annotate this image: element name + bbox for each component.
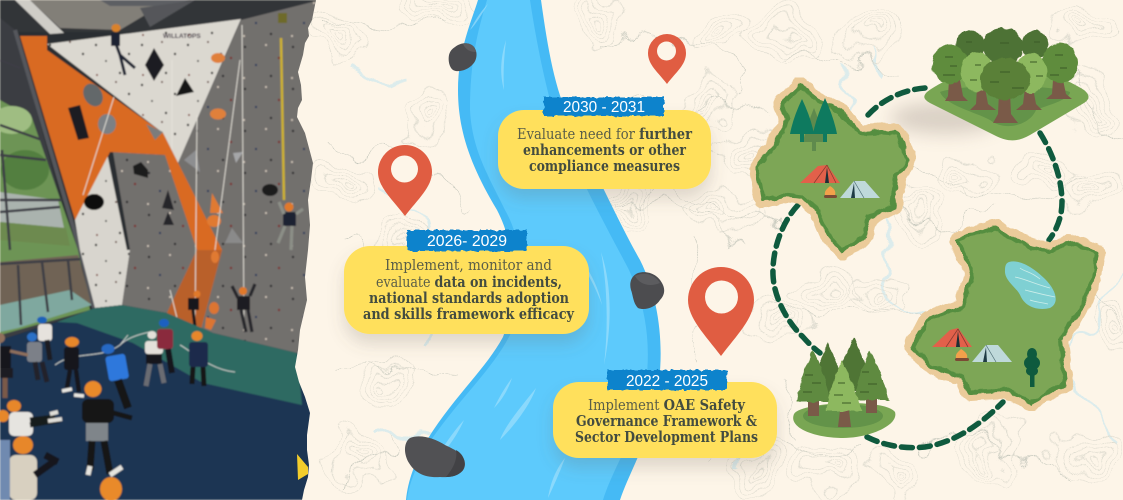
photo climbing holds: WILLATOPS bbox=[163, 33, 201, 40]
text block: 2026-2029: Implement, monitor and bbox=[385, 258, 552, 274]
icon: campfire bbox=[824, 186, 837, 198]
island 2: campsite with lake bbox=[913, 228, 1097, 402]
icon: lake bbox=[1005, 261, 1056, 309]
forest crowns bbox=[932, 28, 1078, 100]
forest shadow bbox=[890, 102, 1000, 134]
pin: 2030-2031 bbox=[648, 34, 686, 84]
text block: 2030-2031 bbox=[517, 126, 692, 175]
photo: climbing wall bbox=[0, 0, 320, 500]
island 1 land bbox=[757, 86, 908, 252]
photo ceiling bbox=[14, 0, 235, 36]
photo orange wall bbox=[20, 36, 222, 333]
forest: pine trees bbox=[793, 337, 895, 438]
island 1: campsite bbox=[757, 86, 908, 252]
photo grey wall bbox=[113, 0, 320, 356]
photo climbing holds bbox=[84, 33, 278, 330]
dashed trail bbox=[773, 88, 1062, 448]
text block: 2026-2029: and skills framework efficacy bbox=[363, 306, 575, 323]
callout: 2026-2029 bbox=[344, 230, 589, 334]
forest base bbox=[924, 68, 1088, 140]
callout: 2022-2025 bbox=[553, 370, 777, 458]
icon: red tent bbox=[932, 328, 972, 347]
banner: 2026-2029: 2026- 2029 bbox=[427, 233, 507, 250]
background: long contour lines bbox=[330, 24, 1123, 480]
rock 3 bbox=[405, 436, 465, 477]
photo floor bbox=[0, 305, 320, 500]
text block: 2026-2029: national standards adoption bbox=[369, 290, 569, 307]
text block: 2026-2029 bbox=[363, 258, 575, 323]
pine trunks bbox=[808, 398, 877, 427]
text block: 2022-2025: Governance Framework & bbox=[576, 413, 757, 430]
icon: red tent bbox=[800, 165, 840, 183]
background: topographic contour map bbox=[314, 0, 1123, 498]
river highlights bbox=[428, 4, 610, 498]
pin: 2026-2029 bbox=[378, 145, 432, 216]
pine crowns bbox=[797, 337, 889, 411]
icon: blue tent bbox=[840, 181, 880, 198]
icon: blue tent bbox=[972, 345, 1012, 362]
photo white wall bbox=[47, 19, 241, 308]
pine base bbox=[793, 403, 895, 438]
callout: 2030-2031 bbox=[498, 97, 711, 189]
banner: 2030-2031: 2030 - 2031 bbox=[563, 99, 645, 116]
icon: pine trees bbox=[790, 98, 837, 151]
text block: 2030-2031: Evaluate need for further bbox=[517, 126, 692, 143]
rock 2 bbox=[630, 272, 664, 309]
icon: campfire bbox=[955, 349, 969, 361]
forest: broadleaf trees bbox=[924, 28, 1088, 140]
text block: 2022-2025: Sector Development Plans bbox=[575, 429, 758, 446]
forest leaf marks bbox=[943, 42, 1067, 88]
photo window bbox=[0, 18, 94, 340]
forest ground patch bbox=[940, 86, 1070, 126]
text block: 2022-2025 bbox=[575, 397, 758, 446]
text block: 2030-2031: compliance measures bbox=[529, 158, 680, 175]
banner: 2030-2031 bbox=[544, 97, 664, 116]
icon: tree bbox=[1024, 348, 1040, 387]
banner: 2026-2029 bbox=[407, 230, 527, 251]
photo group of people bbox=[0, 316, 208, 500]
text block: 2026-2029: evaluate data on incidents, bbox=[376, 274, 562, 291]
island 2 land bbox=[913, 228, 1097, 402]
rock 1 bbox=[449, 43, 477, 71]
pine ground patch bbox=[803, 404, 883, 428]
banner: 2022-2025: 2022 - 2025 bbox=[626, 373, 708, 390]
text block: 2030-2031: enhancements or other bbox=[523, 142, 686, 159]
background: pale map streams bbox=[355, 60, 1120, 480]
river bbox=[406, 0, 661, 500]
text block: 2022-2025: Implement OAE Safety bbox=[588, 397, 746, 414]
pin: 2022-2025 bbox=[688, 267, 754, 356]
forest trunks bbox=[945, 80, 1072, 123]
yellow accent in photo bbox=[297, 454, 308, 480]
banner: 2022-2025 bbox=[607, 370, 727, 390]
photo ropes bbox=[82, 24, 246, 318]
pine needle marks bbox=[803, 372, 877, 403]
photo climbers bbox=[111, 13, 303, 361]
